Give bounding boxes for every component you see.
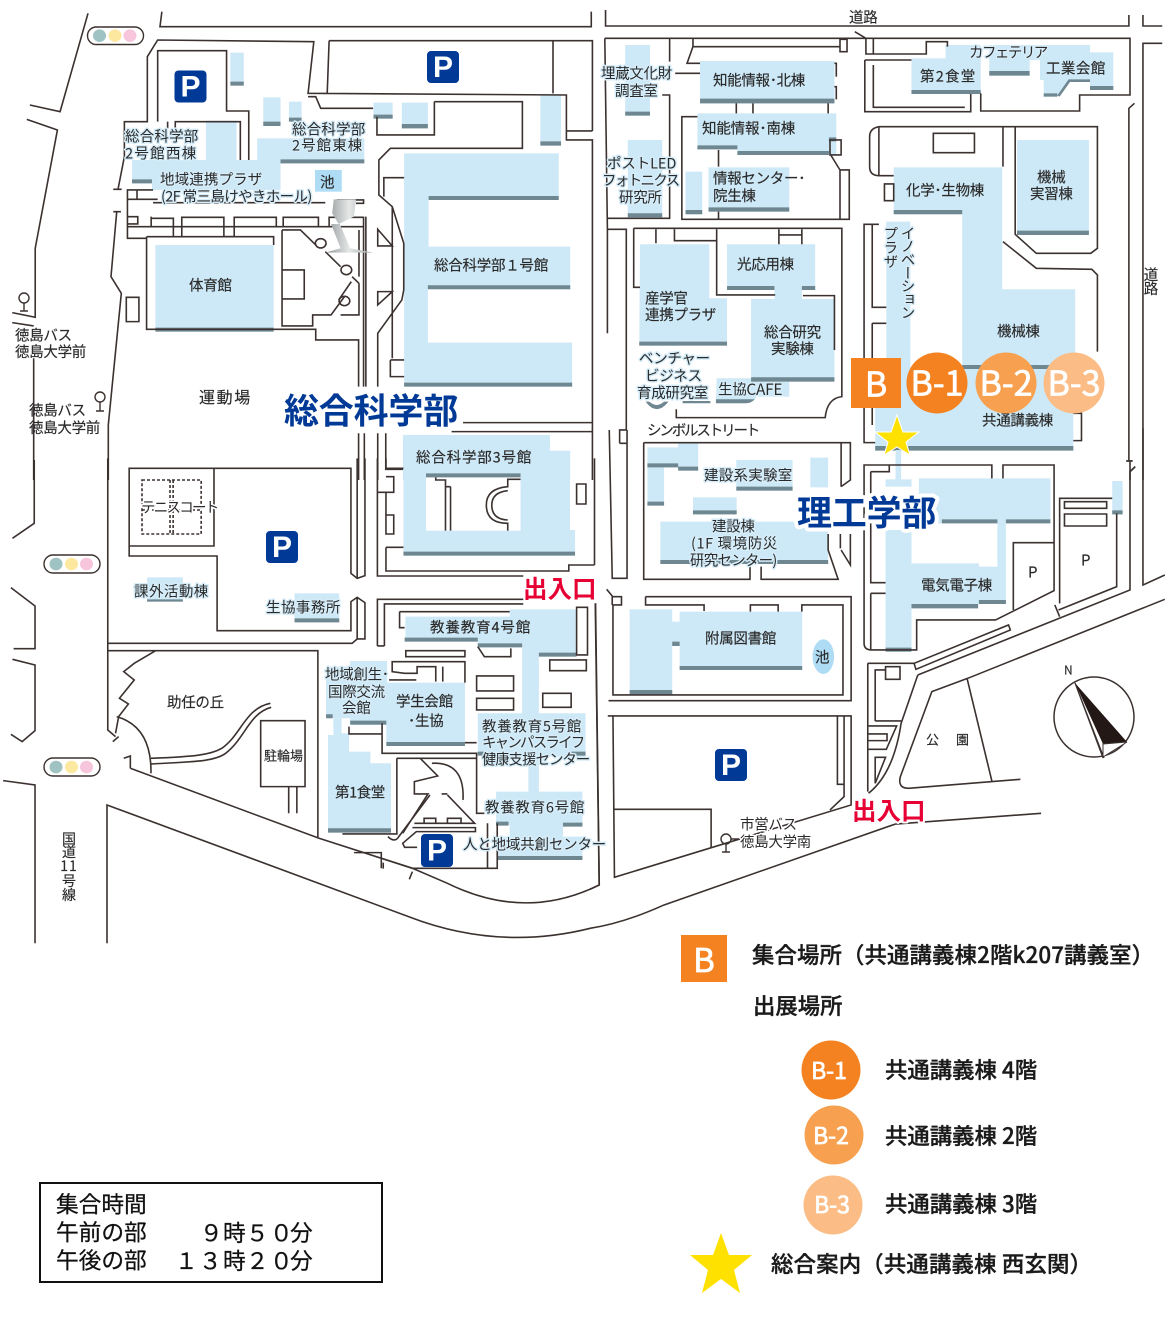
label: national route 11: 国 [62, 829, 76, 849]
label: info south: 知能情報･南棟 [702, 118, 796, 138]
parking marker: north centre: P [433, 51, 453, 84]
exhibit marker B-1 [906, 352, 968, 414]
label: mechanical building: 機械棟 [997, 320, 1040, 342]
afternoon session time: 午後の部 [56, 1242, 147, 1276]
label: student hall: 学生会館 [396, 690, 453, 712]
label: information center: 院生棟 [713, 184, 756, 206]
label: machine workshop: 機械 [1037, 166, 1065, 188]
map labels: north-east [601, 6, 1159, 440]
label: photonics: フォトニクス [602, 170, 680, 190]
label: education 6: 教養教育6号館 [485, 796, 584, 818]
legend: B-3 badge: B-3 [814, 1186, 850, 1220]
label: engineering hall: 工業会館 [1046, 58, 1105, 78]
label: info north: 知能情報･北棟 [713, 70, 806, 90]
label: environmental center line 2: 研究センター) [690, 550, 777, 570]
label: construction lab: 建設系実験室 [704, 464, 792, 486]
label: building 2 west second line: 2号館西棟 [125, 142, 197, 164]
label: bicycle parking: 駐輪場 [264, 746, 303, 764]
label: symbol street: シンボルストリート [647, 420, 760, 440]
parking marker: south-east [715, 749, 747, 782]
traffic light: middle [44, 555, 100, 573]
label: building 2 east: 総合科学部 [292, 118, 365, 140]
afternoon session time: １３時２０分 [175, 1242, 313, 1276]
label: national route 11: 11 [60, 856, 78, 876]
label: road right: 道 [1144, 264, 1158, 284]
legend: B-3 text: 共通講義棟 3階 [885, 1187, 1037, 1219]
road and site outlines: south-east [590, 428, 1165, 928]
heading: Faculty of Integrated Arts and Sciences: 総合科学部 [284, 384, 458, 434]
label: co-creation center: 人と地域共創センター [463, 834, 606, 854]
label: student hall: ･生協 [408, 710, 443, 730]
legend: B-2 badge: B-2 [813, 1117, 849, 1151]
label: bus stop west: 徳島大学前 [29, 416, 100, 438]
legend: meeting place icon [681, 934, 727, 982]
label: electrical building: 電気電子棟 [921, 574, 993, 596]
morning session time: 午前の部 [56, 1214, 147, 1248]
label: health center: 健康支援センター [482, 748, 590, 770]
label: second cafeteria: 第2食堂 [920, 66, 975, 86]
label: gymnasium: 体育館 [189, 274, 232, 296]
campus map base: north-west quadrant buildings [132, 53, 572, 480]
parking marker: sports ground: P [272, 531, 292, 564]
legend: star icon [690, 1233, 752, 1293]
road and site outlines: north-west [12, 12, 592, 480]
exhibit marker B-3: B-3 [1047, 356, 1101, 406]
map labels: south [325, 464, 1090, 854]
label: national route 11: 線 [62, 885, 76, 905]
legend: meeting place text: 集合場所（共通講義棟2階k207講義室） [752, 938, 1154, 970]
entrance label: south: 出入口 [852, 792, 926, 828]
star marker: information desk [875, 415, 919, 455]
label: pond: 池 [320, 172, 334, 192]
label: LED institute: ポストLED [607, 152, 676, 174]
parking marker: north centre [427, 51, 459, 84]
map labels: north-west [15, 118, 548, 905]
label: club building: 課外活動棟 [134, 580, 209, 602]
label: tennis court: テニスコート [141, 496, 219, 518]
label: bus stop north: 徳島大学前 [15, 340, 86, 362]
traffic light: lower [44, 758, 100, 776]
legend [681, 934, 1154, 1293]
campus map base: south-west quadrant buildings [147, 460, 586, 860]
label: research lab: 総合研究 [764, 322, 821, 342]
label: machine workshop: 実習棟 [1030, 182, 1073, 204]
meeting point marker B [851, 358, 901, 408]
exhibit marker B-1: B-1 [910, 356, 964, 406]
label: industry plaza: 産学官 [645, 288, 688, 308]
bus stop icon: south [721, 834, 740, 852]
parking marker: education buildings: P [427, 834, 447, 868]
label: information center: 情報センター･ [713, 168, 805, 188]
parking marker: north-west: P [180, 70, 201, 104]
label: regional exchange hall: 地域創生･ [325, 664, 389, 684]
label: regional exchange hall: 国際交流 [328, 680, 386, 702]
label: common lecture building: 共通講義棟 [982, 410, 1054, 430]
label: building 1: 総合科学部１号館 [434, 254, 548, 276]
campus map base: north-east quadrant buildings [625, 45, 1113, 451]
label: campus life: キャンパスライフ [482, 732, 585, 752]
exhibit marker B-3 [1044, 352, 1104, 414]
label: bus stop west: 徳島バス [29, 400, 86, 420]
label: city bus stop: 徳島大学南 [740, 830, 811, 852]
exhibit marker B-2 [976, 352, 1036, 414]
label: education 4: 教養教育4号館 [430, 616, 530, 638]
label: road right: 路 [1144, 278, 1159, 298]
label: Keyaki hall: (2F 常三島けやきホール) [161, 186, 312, 206]
label: regional exchange hall: 会館 [342, 696, 370, 718]
bus stop icon: west [95, 392, 105, 411]
legend: B-1 badge [802, 1040, 860, 1100]
bus stop icon: north [19, 293, 29, 311]
legend: B-1 text: 共通講義棟 4階 [885, 1053, 1037, 1085]
traffic light: top [88, 27, 144, 44]
exhibit marker B-2: B-2 [979, 356, 1033, 406]
label: industry plaza: 連携プラザ [645, 304, 716, 324]
parking marker: education buildings [421, 834, 453, 868]
label: building 2 east second line: 2号館東棟 [292, 134, 363, 156]
label: co-op cafe: 生協CAFE [718, 378, 782, 400]
label: construction building: 建設棟 [712, 516, 755, 536]
heading: Faculty of Science and Technology: 理工学部 [797, 486, 936, 536]
label: parking P far right: P [1081, 550, 1090, 570]
label: park: 公 園 [926, 730, 971, 748]
legend: meeting place icon: B [693, 934, 715, 982]
meeting times box [40, 1183, 382, 1282]
morning session time: ９時５０分 [200, 1214, 313, 1248]
label: chemistry biology: 化学･生物棟 [906, 180, 985, 200]
compass: N [1064, 662, 1073, 678]
label: research institute: 研究所 [619, 186, 662, 208]
label: library: 附属図書館 [705, 628, 776, 648]
label: venture lab: ベンチャー [639, 348, 710, 368]
label: national route 11: 道 [62, 842, 76, 862]
label: environmental center line 1: (1F 環境防災 [691, 532, 777, 554]
entrance label: north: 出入口 [523, 570, 596, 606]
label: first cafeteria: 第1食堂 [335, 782, 385, 802]
campus map base: south-east quadrant buildings [630, 443, 1123, 694]
label: venture lab: 育成研究室 [637, 382, 708, 402]
legend: exhibit heading: 出展場所 [753, 989, 843, 1021]
meeting point marker B: B [865, 358, 887, 406]
compass [1054, 662, 1134, 758]
label: regional plaza: 地域連携プラザ [160, 168, 262, 190]
label: national route 11: 号 [62, 871, 76, 891]
parking marker: south-east: P [721, 749, 741, 782]
label: archaeology office: 埋蔵文化財 [601, 62, 672, 84]
label: cafeteria: カフェテリア [969, 42, 1048, 62]
label: venture lab: ビジネス [645, 364, 702, 386]
label: archaeology office: 調査室 [615, 80, 658, 100]
label: co-op office: 生協事務所 [266, 596, 340, 618]
legend: B-3 badge [804, 1176, 862, 1234]
parking marker: sports ground [266, 531, 298, 564]
label: education 5: 教養教育5号館 [482, 716, 581, 736]
legend: B-1 badge: B-1 [811, 1052, 847, 1086]
label: building 3: 総合科学部3号館 [416, 446, 531, 468]
meeting times title: 集合時間 [56, 1186, 147, 1220]
label: bus stop north: 徳島バス [15, 324, 72, 346]
label: optical building: 光応用棟 [737, 254, 795, 274]
road and site outlines: north-east [605, 10, 1162, 480]
label: Sukeno hill: 助任の丘 [167, 692, 224, 712]
legend: B-2 text: 共通講義棟 2階 [885, 1119, 1037, 1151]
label: sports ground: 運動場 [199, 384, 250, 408]
label: city bus stop: 市営バス [740, 814, 797, 834]
label: parking P right: P [1028, 562, 1037, 582]
legend: B-2 badge [804, 1106, 864, 1164]
label: road top: 道路 [849, 6, 878, 28]
label: innovation plaza: イノベーション [898, 226, 918, 318]
label: research lab: 実験棟 [771, 338, 814, 358]
road and site outlines: south-west [3, 458, 599, 943]
legend: star text: 総合案内（共通講義棟 西玄関） [771, 1247, 1092, 1279]
label: building 2 west: 総合科学部 [125, 126, 198, 146]
parking marker: north-west [174, 70, 206, 104]
label: innovation plaza second line: プラザ [880, 226, 902, 269]
label: library pond: 池 [815, 646, 829, 668]
